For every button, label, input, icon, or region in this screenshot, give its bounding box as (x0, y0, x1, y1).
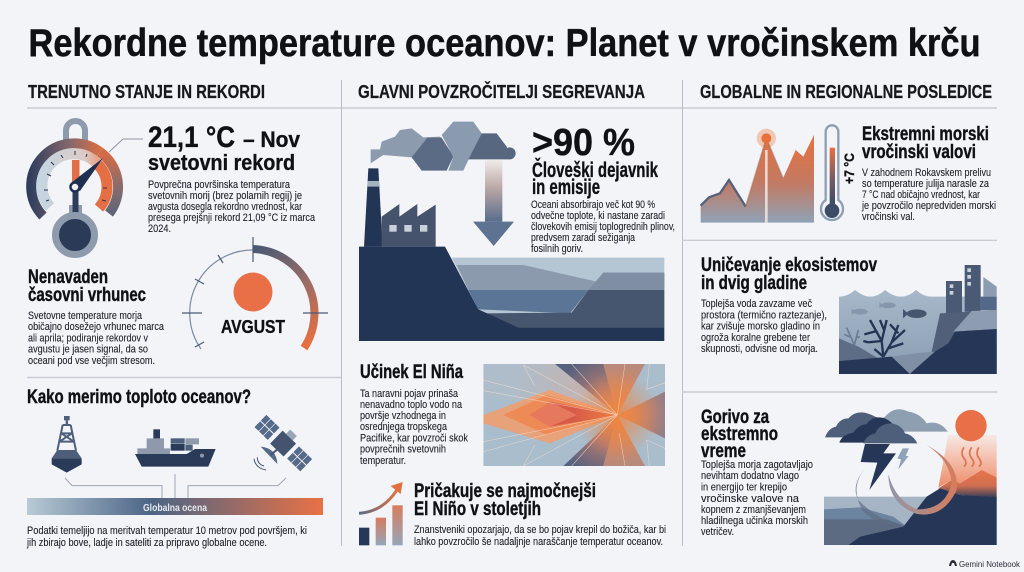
text: extreme weather description: kopnem z zmanjševanjem (701, 504, 806, 516)
icon: thermometer gauge (31, 121, 143, 254)
text: El Nino description: Ta naravni pojav prinaša (360, 388, 458, 400)
column heading: GLAVNI POVZROČITELJI SEGREVANJA (358, 81, 645, 102)
text: record description: presega prejšnji rekord 21,09 °C iz marca (148, 212, 315, 224)
text: El Nino description (360, 388, 469, 467)
text: El Nino description: nenavadno toplo vodo na (360, 399, 462, 411)
icon: satellite (254, 411, 316, 472)
heading: fuel for extreme weather: ekstremno (701, 424, 778, 445)
text: human factor description (531, 199, 675, 255)
heading: marine heatwaves: Ekstremni morski (862, 124, 989, 145)
text: marine heatwaves description: 7 °C nad običajno vrednost, kar (862, 189, 980, 201)
bar: global estimate (27, 498, 323, 515)
heading: human factor (532, 158, 658, 199)
text: strongest El Nino description: Znanstveniki opozarjajo, da se bo pojav krepil do božiča, kar bi (414, 524, 666, 536)
icon: ship (135, 429, 216, 467)
panel: global and regional consequences (700, 82, 997, 545)
panel: current state and records (28, 82, 328, 367)
footer: Gemini Notebook mark: Gemini Notebook (959, 560, 1021, 569)
text: ecosystems description (701, 298, 827, 355)
record value: – Nov (243, 127, 301, 152)
text: human factor description: človekovih emisij toplogrednih plinov, (531, 221, 675, 233)
text: record description (148, 179, 315, 235)
heading: marine heatwaves (862, 124, 989, 163)
text: unusual peak description: Svetovne temperature morja (28, 310, 142, 322)
illustration: storm, sun and coast (824, 409, 997, 545)
record value: svetovni rekord (148, 150, 295, 175)
text: extreme weather description: hladilnega učinka morskih (701, 515, 808, 527)
label: plus seven degrees: +7 °C (841, 153, 857, 184)
text: extreme weather description: in energijo ter krepijo (701, 482, 787, 494)
text: ecosystems description: prostora (termično raztezanje), (701, 310, 827, 322)
text: ecosystems description: kar zvišuje morsko gladino in (701, 320, 820, 332)
text: measuring description (26, 525, 307, 549)
illustration: El Nino rays (483, 364, 665, 466)
panel: main drivers of warming (358, 81, 675, 548)
bar: global estimate: Globalna ocena (143, 503, 207, 514)
text: record description: svetovnih morij (brez polarnih regij) je (148, 190, 302, 202)
heading: ecosystems and sea level (701, 255, 877, 294)
text: extreme weather description: vetričev. (701, 526, 734, 538)
text: marine heatwaves description: so temperature julija narasle za (862, 178, 989, 190)
connector lines (65, 474, 286, 498)
text: El Nino description: površje vzhodnega in (360, 410, 446, 422)
illustration: sea level rise and coral (839, 265, 997, 374)
text: unusual peak description: oceani pod vse večjim stresom. (28, 355, 155, 367)
heading: fuel for extreme weather (701, 407, 778, 462)
heading: marine heatwaves: vročinski valovi (862, 142, 976, 163)
text: ecosystems description: Toplejša voda zavzame več (701, 298, 813, 310)
text: unusual peak description: ali aprila; podiranje rekordov v (28, 332, 149, 344)
text: extreme weather description: Toplejša morja zagotavljajo (701, 459, 813, 471)
text: unusual peak description (28, 310, 164, 367)
icon: buoy (52, 416, 82, 473)
icon: August gauge (182, 237, 328, 349)
text: marine heatwaves description: vročinski val. (862, 211, 915, 223)
text: El Nino description: Pacifike, kar povzroči skok (360, 432, 469, 444)
heading: human factor: in emisije (532, 176, 600, 199)
record value (148, 121, 301, 175)
heading: fuel for extreme weather: vreme (701, 441, 746, 462)
text: record description: 2024. (148, 223, 171, 235)
heading: strongest El Nino (414, 481, 596, 520)
text: human factor description: fosilnih goriv. (531, 243, 583, 255)
chart: marine heat peak (701, 129, 814, 223)
record value: 21,1 °C (148, 121, 235, 154)
column heading: TRENUTNO STANJE IN REKORDI (28, 82, 265, 102)
icon: thermometer plus seven (821, 125, 843, 220)
heading: ecosystems and sea level: Uničevanje ekosistemov (701, 255, 877, 276)
text: ecosystems description: ogroža koralne grebene ter (701, 332, 810, 344)
heading: unusual peak: Nenavaden (28, 267, 108, 288)
heading: unusual peak: časovni vrhunec (28, 285, 146, 306)
text: human factor description: predvsem zaradi sežiganja (531, 232, 635, 244)
heading: measuring: Kako merimo toploto oceanov? (27, 387, 251, 408)
stat: over 90 percent: >90 % (532, 122, 635, 164)
panel: how ocean heat is measured (26, 387, 323, 549)
text: marine heatwaves description: je povzročilo nepredviden morski (861, 200, 996, 212)
text: measuring description: jih zbirajo bove, ladje in sateliti za pripravo globalne ocene. (26, 537, 267, 549)
text: record description: avgusta dosegla rekordno vrednost, kar (148, 201, 302, 213)
text: unusual peak description: običajno dosežejo vrhunec marca (28, 321, 164, 333)
text: strongest El Nino description (414, 524, 666, 548)
icon: August gauge: AVGUST (221, 317, 285, 337)
text: marine heatwaves description (861, 167, 996, 223)
heading: ecosystems and sea level: in dvig gladine (701, 273, 807, 294)
text: strongest El Nino description: lahko povzročilo še nadaljnje naraščanje temperatur oceanov. (414, 536, 663, 548)
text: extreme weather description (701, 459, 813, 538)
text: El Nino description: temperatur. (360, 455, 406, 467)
text: measuring description: Podatki temeljijo na meritvah temperatur 10 metrov pod površjem, ki (27, 525, 307, 537)
text: human factor description: odvečne toplote, ki nastane zaradi (531, 210, 665, 222)
heading: unusual peak (28, 267, 146, 306)
text: ecosystems description: skupnosti, odvisne od morja. (701, 343, 818, 355)
text: El Nino description: povprečnih svetovnih (360, 444, 446, 456)
icon: rising bars and arrow (359, 482, 403, 545)
text: record description: Povprečna površinska temperatura (148, 179, 290, 191)
text: human factor description: Oceani absorbirajo več kot 90 % (531, 199, 655, 211)
heading: strongest El Nino: El Niño v stoletjih (414, 499, 541, 520)
heading: fuel for extreme weather: Gorivo za (701, 407, 769, 428)
heading: El Nino effect: Učinek El Niña (360, 362, 463, 383)
text: El Nino description: osrednjega tropskega (360, 421, 447, 433)
text: extreme weather description: vročinske valove na (701, 493, 799, 505)
text: extreme weather description: nevihtam dodatno vlago (701, 470, 799, 482)
heading: human factor: Človeški dejavnik (532, 158, 658, 182)
heading: strongest El Nino: Pričakuje se najmočnejši (414, 481, 596, 502)
illustration: factory, clouds and ocean (359, 122, 664, 341)
text: unusual peak description: avgustu je jasen signal, da so (28, 344, 148, 356)
text: marine heatwaves description: V zahodnem Rokavskem prelivu (862, 167, 991, 179)
